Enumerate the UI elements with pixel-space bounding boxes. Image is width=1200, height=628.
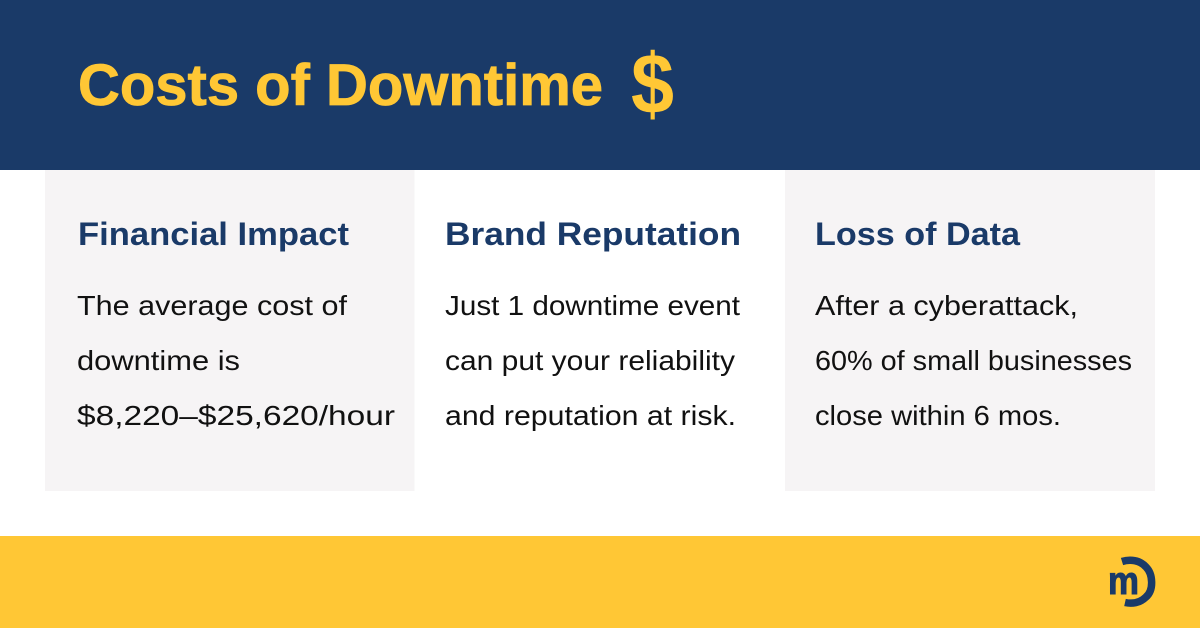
- text: reputation risk: [445, 290, 740, 431]
- panel: brand reputation: [445, 216, 741, 431]
- text: average cost: [77, 290, 395, 431]
- text: cyberattack closures: 60% of small businesses: [815, 345, 1132, 376]
- footer band: [0, 536, 1200, 628]
- heading: brand reputation: Brand Reputation: [445, 216, 741, 252]
- text: average cost: $8,220–$25,620/hour: [77, 400, 395, 431]
- heading: loss of data: Loss of Data: [815, 216, 1020, 252]
- text: cyberattack closures: [815, 290, 1132, 431]
- text: cyberattack closures: close within 6 mos.: [815, 400, 1061, 431]
- header band: [0, 0, 1200, 170]
- title: Costs of Downtime: [78, 53, 603, 118]
- text: average cost: The average cost of: [77, 290, 347, 321]
- panel: financial impact: [45, 170, 414, 491]
- icon: dollar sign: $: [631, 37, 674, 132]
- text: cyberattack closures: After a cyberattack,: [815, 290, 1078, 321]
- heading: financial impact: Financial Impact: [78, 216, 349, 252]
- text: reputation risk: and reputation at risk.: [445, 400, 736, 431]
- text: reputation risk: can put your reliability: [445, 345, 735, 376]
- text: reputation risk: Just 1 downtime event: [445, 290, 740, 321]
- icon: company logo: m: [1108, 560, 1139, 603]
- text: average cost: downtime is: [77, 345, 240, 376]
- panel: loss of data: [785, 170, 1155, 491]
